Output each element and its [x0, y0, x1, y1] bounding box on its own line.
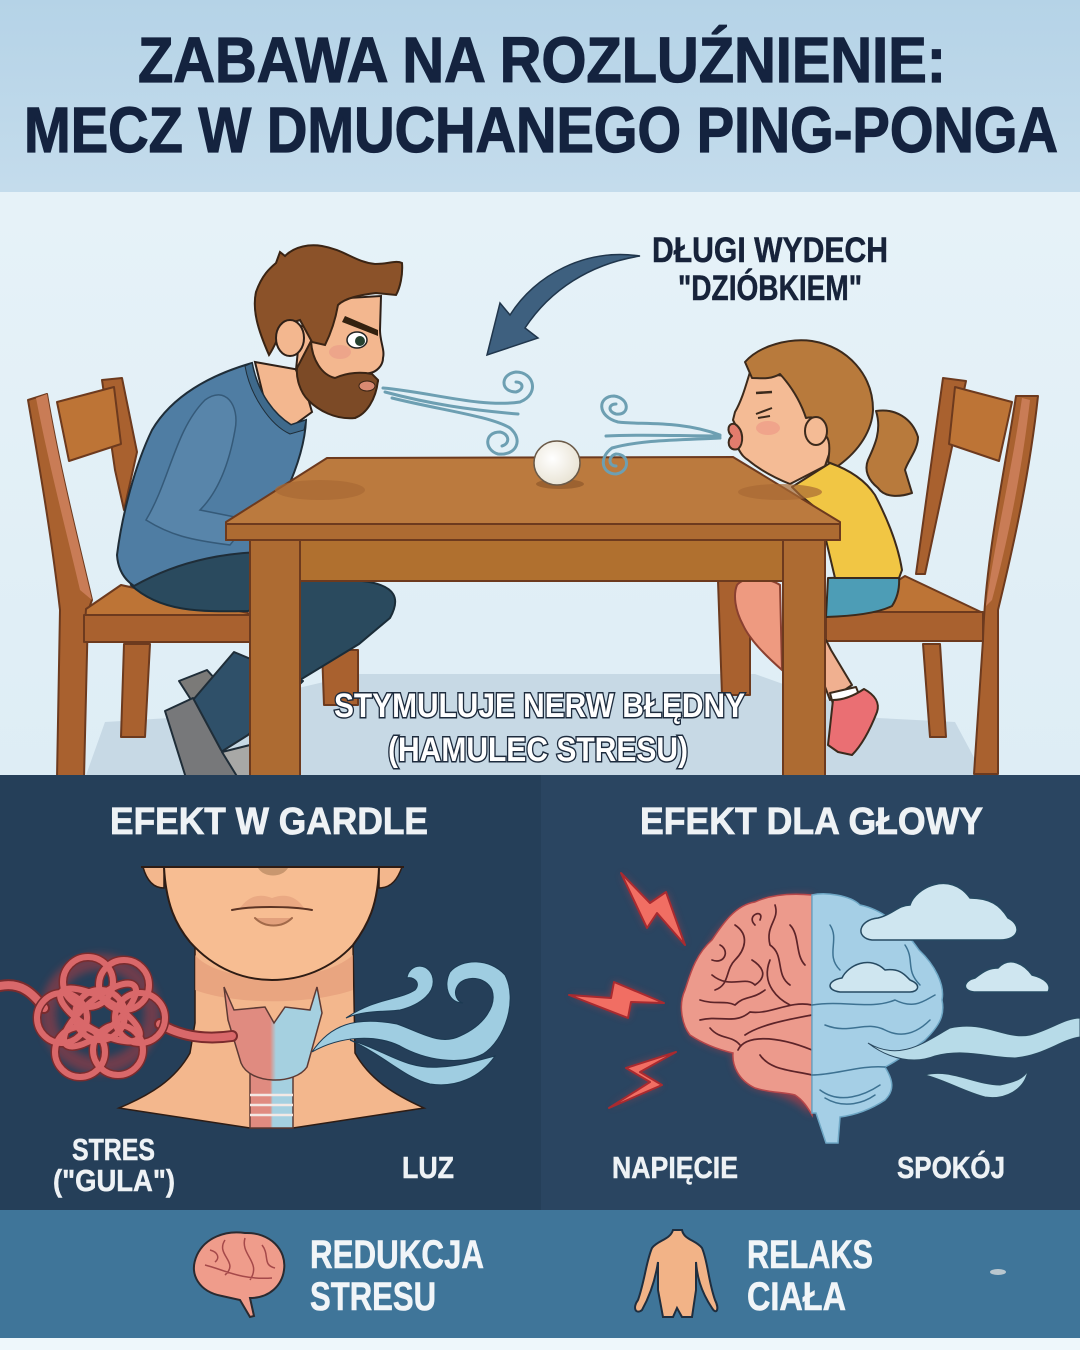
text: body relaxation: RELAKS: [747, 1233, 873, 1277]
child face: [733, 372, 834, 484]
man eye and brow: [329, 316, 378, 359]
child shorts: [826, 576, 899, 617]
child ponytail: [866, 410, 918, 496]
vagus nerve caption: (HAMULEC STRESU): [388, 731, 688, 769]
icon: brain: [194, 1232, 284, 1317]
air flow swirl: [312, 962, 510, 1085]
label: stress: ("GULA"): [53, 1163, 175, 1198]
man back leg and shoe: [165, 652, 303, 778]
icon: body: [635, 1230, 717, 1317]
table leg left: [250, 540, 300, 776]
man beard: [297, 341, 378, 418]
vagus nerve caption: [334, 687, 745, 769]
text: stress reduction: [310, 1233, 484, 1319]
exhale callout: "DZIÓBKIEM": [678, 268, 862, 308]
child: [728, 340, 918, 755]
brain glow: [685, 895, 812, 1115]
bottom band: [0, 1210, 1080, 1338]
left chair: [28, 378, 358, 778]
table: [226, 457, 840, 776]
speck: [990, 1269, 1006, 1275]
child back leg: [735, 579, 782, 670]
table top: [226, 457, 840, 540]
panel: head effect: [541, 775, 1080, 1210]
child lower leg and shoe: [815, 640, 878, 755]
heading: head: EFEKT DLA GŁOWY: [640, 801, 983, 843]
panel: throat effect: [0, 775, 541, 1210]
lightning bolts: [569, 873, 685, 1108]
label: tension: NAPIĘCIE: [612, 1150, 738, 1185]
man sweater: [117, 363, 306, 586]
text: body relaxation: CIAŁA: [747, 1275, 846, 1319]
table apron: [295, 540, 785, 581]
neck and shoulders: [119, 945, 424, 1128]
child lips: [728, 424, 742, 449]
text: stress reduction: STRESU: [310, 1275, 436, 1319]
label: stress: [53, 1132, 175, 1198]
clouds: [830, 883, 1049, 992]
chin and jaw: [141, 867, 404, 980]
brain: calm half: [812, 894, 943, 1143]
man face: [296, 296, 383, 418]
table leg right: [783, 540, 825, 776]
brain: tense half: [681, 894, 812, 1115]
label: relief: LUZ: [402, 1150, 454, 1185]
left breath: [383, 372, 532, 454]
label: calm: SPOKÓJ: [897, 1149, 1005, 1185]
man trousers: [131, 545, 395, 680]
ping-pong ball: [534, 441, 584, 489]
child closed eye and cheek: [756, 392, 780, 435]
text: body relaxation: [747, 1233, 873, 1319]
title band: [0, 0, 1080, 192]
label: stress: STRES: [72, 1132, 155, 1167]
man lips: [359, 381, 375, 391]
exhale callout: DŁUGI WYDECH: [652, 231, 888, 270]
man: [117, 245, 402, 778]
man neck: [255, 362, 312, 428]
arrow: [487, 255, 640, 355]
mouth: [232, 896, 312, 926]
child shirt: [792, 463, 902, 578]
larynx: [224, 987, 322, 1128]
right breath: [602, 396, 720, 474]
floor: [85, 674, 985, 778]
nose shadow: [258, 868, 288, 876]
man hair: [255, 245, 402, 355]
child ear: [805, 417, 827, 445]
text: stress reduction: REDUKCJA: [310, 1233, 484, 1277]
man ear: [276, 320, 304, 356]
ears: [143, 867, 402, 888]
vagus nerve caption: STYMULUJE NERW BŁĘDNY: [334, 687, 745, 725]
rope: stress knot: [0, 957, 232, 1077]
exhale callout: [652, 231, 888, 308]
heading: throat: EFEKT W GARDLE: [110, 801, 428, 843]
child hair: [745, 340, 873, 466]
title line 1: ZABAWA NA ROZLUŹNIENIE:: [138, 24, 946, 96]
calm wind ribbons: [868, 1018, 1080, 1098]
right chair: [718, 378, 1038, 774]
background: [0, 192, 1080, 782]
